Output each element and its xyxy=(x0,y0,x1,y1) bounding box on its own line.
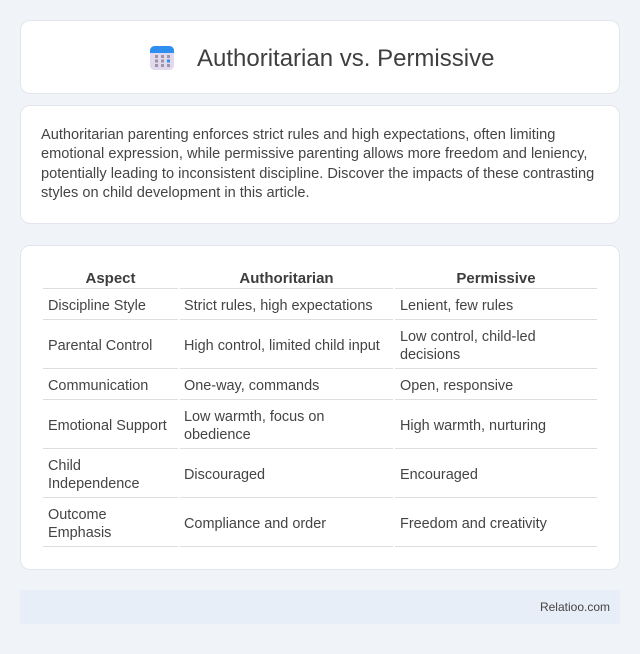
icon: calendar xyxy=(150,46,174,70)
header panel xyxy=(20,20,620,94)
comparison table: Strict rules, high expectations xyxy=(184,298,373,314)
comparison table: Lenient, few rules xyxy=(400,298,513,314)
comparison table: One-way, commands xyxy=(184,378,319,394)
row: Emotional Support: Emotional Support xyxy=(48,418,167,434)
comparison table: Freedom and creativity xyxy=(400,516,547,532)
row: Child Independence: Independence xyxy=(48,476,140,492)
footer credit: Relatioo.com xyxy=(540,600,610,614)
comparison table: Compliance and order xyxy=(184,516,326,532)
row: Communication: Communication xyxy=(48,378,148,394)
row: Discipline Style: Discipline Style xyxy=(48,298,146,314)
description text: Authoritarian parenting enforces strict rules and high expectations, often limiting xyxy=(41,127,555,143)
header: Authoritarian: Authoritarian xyxy=(239,270,334,287)
comparison table: Low control, child-led xyxy=(400,329,536,345)
row: Parental Control: Parental Control xyxy=(48,338,152,354)
title: Authoritarian vs. Permissive xyxy=(197,45,494,72)
description text: potentially leading to inconsistent discipline. Discover the impacts of these contrasting xyxy=(41,166,594,182)
comparison table: Encouraged xyxy=(400,467,478,483)
row: Outcome Emphasis: Outcome xyxy=(48,507,107,523)
header: Permissive: Permissive xyxy=(456,270,536,287)
comparison table: decisions xyxy=(400,347,460,363)
description text: styles on child development in this article. xyxy=(41,185,310,201)
comparison table: Low warmth, focus on xyxy=(184,409,324,425)
comparison table xyxy=(43,270,597,547)
description panel xyxy=(20,105,620,224)
comparison table panel xyxy=(20,245,620,570)
row: Child Independence: Child xyxy=(48,458,81,474)
row: Outcome Emphasis xyxy=(48,507,111,541)
description text xyxy=(41,127,594,201)
comparison table: High control, limited child input xyxy=(184,338,380,354)
header: Aspect: Aspect xyxy=(85,270,136,287)
comparison table: obedience xyxy=(184,427,251,443)
footer bar xyxy=(20,590,620,624)
row: Outcome Emphasis: Emphasis xyxy=(48,525,111,541)
description text: emotional expression, while permissive parenting allows more freedom and leniency, xyxy=(41,146,587,162)
row: Child Independence xyxy=(48,458,140,492)
comparison table: Discouraged xyxy=(184,467,265,483)
comparison table: Open, responsive xyxy=(400,378,513,394)
comparison table: High warmth, nurturing xyxy=(400,418,546,434)
